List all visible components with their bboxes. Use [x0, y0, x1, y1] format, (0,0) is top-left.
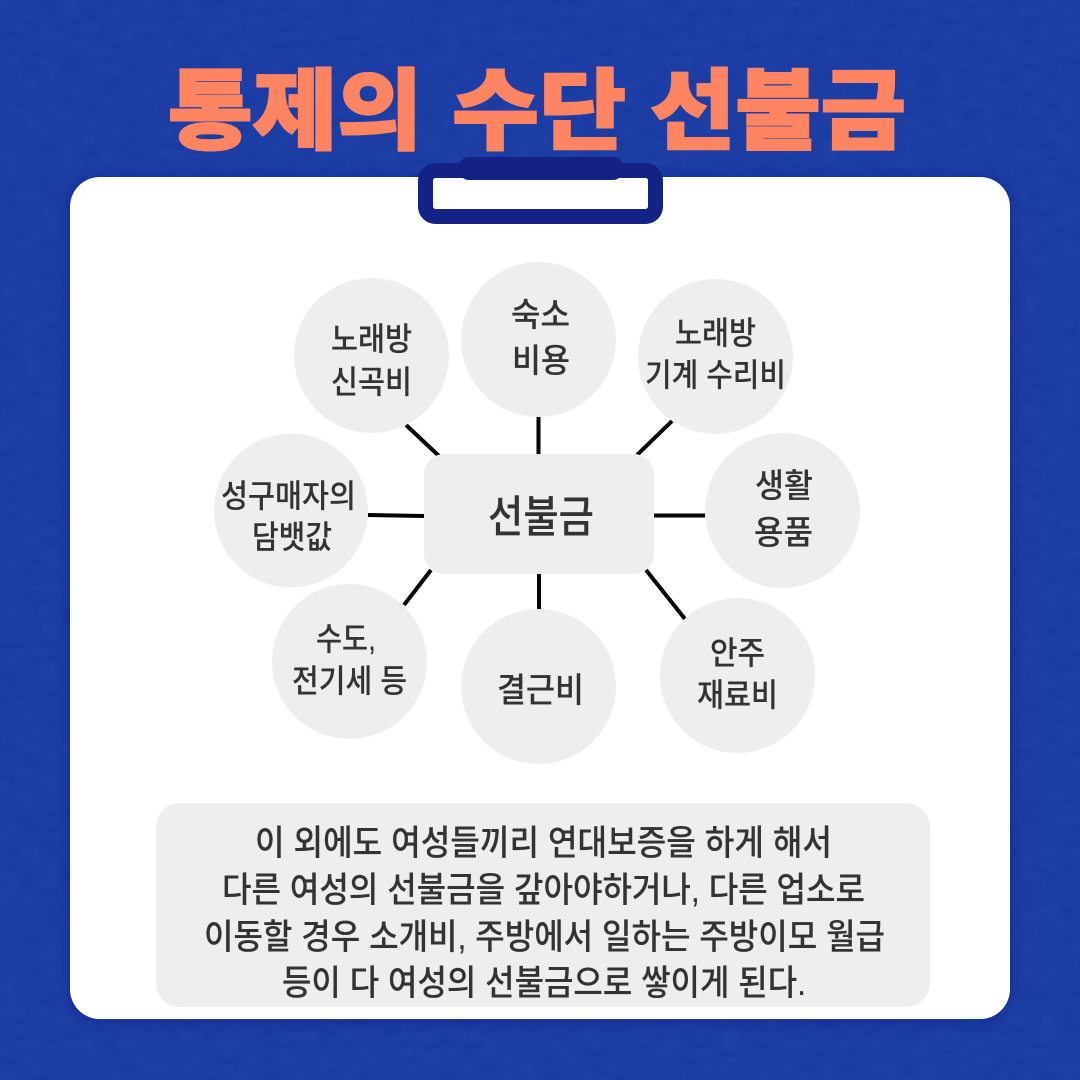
title: 수단	[452, 62, 626, 161]
circle: 성구매자의 담뱃값	[214, 434, 368, 588]
panel: white clipboard card	[70, 177, 1010, 1019]
title	[168, 62, 906, 161]
title: 통제의	[168, 62, 422, 161]
circle: 수도, 전기세 등	[272, 584, 427, 739]
circle: 노래방 기계 수리비: 기계 수리비	[645, 357, 786, 393]
circle: 노래방 신곡비	[294, 278, 449, 433]
circle: 안주 재료비: 안주	[710, 635, 765, 671]
circle: 노래방 신곡비: 신곡비	[331, 364, 412, 400]
note panel: additional debt explanation: 이 외에도 여성들끼리 연대보증을 하게 해서	[255, 824, 832, 863]
note panel: additional debt explanation	[156, 803, 930, 1007]
title: 선불금	[650, 62, 906, 161]
note panel: additional debt explanation: 다른 여성의 선불금을 갚아야하거나, 다른 업소로	[222, 871, 865, 910]
icon: clipboard clip	[426, 157, 656, 216]
circle: 수도, 전기세 등: 전기세 등	[292, 663, 407, 699]
connector lines	[368, 417, 705, 619]
center box: 선불금: 선불금	[488, 493, 594, 542]
circle: 결근비	[461, 609, 616, 764]
circle: 성구매자의 담뱃값: 성구매자의	[221, 478, 356, 514]
note panel: additional debt explanation: 이동할 경우 소개비, 주방에서 일하는 주방이모 월급	[204, 918, 885, 957]
circle: 안주 재료비	[660, 598, 815, 753]
circle: 노래방 기계 수리비	[638, 279, 793, 434]
circle: 결근비: 결근비	[497, 672, 584, 710]
circle: 안주 재료비: 재료비	[697, 677, 778, 713]
circle: 숙소 비용	[461, 262, 616, 417]
circle: 생활 용품	[705, 433, 860, 588]
circle: 노래방 기계 수리비: 노래방	[675, 315, 756, 351]
circle: 숙소 비용: 숙소	[511, 296, 570, 333]
center box: 선불금	[424, 454, 654, 574]
circle: 노래방 신곡비: 노래방	[331, 321, 412, 357]
note panel: additional debt explanation: 등이 다 여성의 선불금으로 쌓이게 된다.	[282, 964, 806, 1003]
circle: 생활 용품: 생활	[755, 467, 813, 504]
circle: 성구매자의 담뱃값: 담뱃값	[252, 519, 332, 555]
circle: 숙소 비용: 비용	[512, 342, 570, 379]
circle: 생활 용품: 용품	[754, 514, 813, 551]
circle: 수도, 전기세 등: 수도,	[316, 621, 376, 657]
